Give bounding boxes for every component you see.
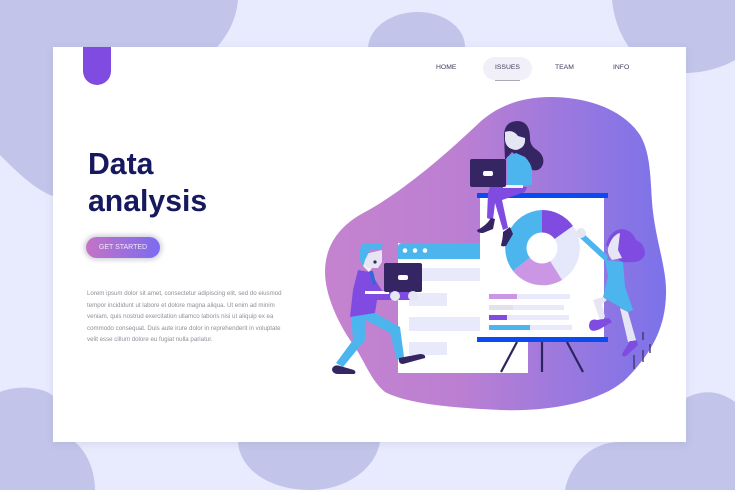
logo tab (83, 47, 111, 85)
nav item: team: TEAM (555, 64, 574, 71)
nav item: issues: ISSUES (495, 64, 520, 71)
browser window (398, 243, 528, 373)
figure: girl pointing at chart (576, 228, 650, 369)
presentation board (477, 193, 608, 372)
button: get started (86, 237, 160, 258)
nav item: info: INFO (613, 64, 629, 71)
body text: commodo consequat. Duis aute irure dolor in reprehenderit in voluptate (87, 324, 281, 332)
title: analysis (88, 185, 207, 218)
nav highlight: issues (483, 57, 532, 80)
title (88, 148, 207, 218)
figure: woman sitting on board (470, 121, 543, 246)
body text: veniam, quis nostrud exercitation ullamco laboris nisi ut aliquip ex ea (87, 313, 273, 320)
figure: man with laptop (332, 243, 425, 374)
body text: velit esse cillum dolore eu fugiat nulla pariatur. (87, 336, 213, 343)
body text: tempor incididunt ut labore et dolore magna aliqua. Ut enim ad minim (87, 302, 275, 308)
nav item: home: HOME (436, 64, 456, 71)
title: Data (88, 148, 153, 181)
body text (87, 290, 282, 343)
gradient blob (325, 97, 666, 410)
donut chart (505, 210, 580, 285)
button: get started: GET STARTED (99, 244, 147, 251)
panel: landing page card (53, 47, 686, 442)
navigation (436, 57, 629, 81)
bar list (489, 294, 572, 330)
nav underline (495, 80, 520, 81)
body text: Lorem ipsum dolor sit amet, consectetur adipiscing elit, sed do eiusmod (87, 290, 282, 297)
